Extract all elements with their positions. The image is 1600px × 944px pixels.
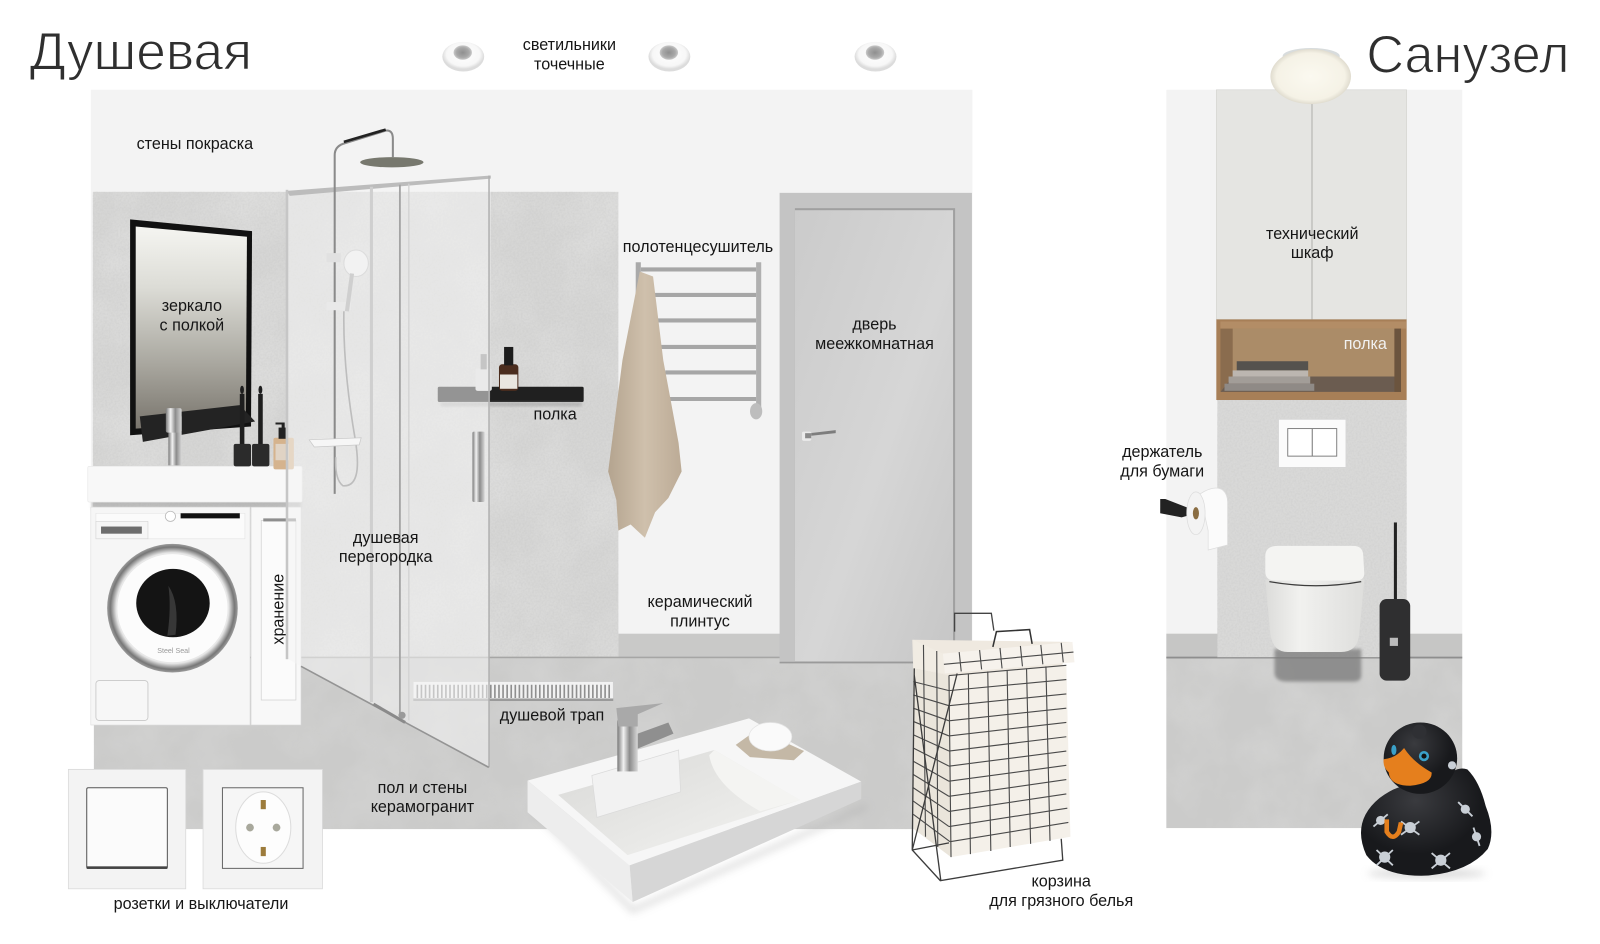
duck beak: [1384, 748, 1432, 786]
label: floor and walls: керамогранит: [371, 798, 475, 816]
toilet shadow: [1274, 649, 1361, 682]
label: door: дверь: [852, 316, 897, 334]
storage cabinet: [251, 507, 301, 725]
basin faucet: [616, 703, 673, 771]
wall-hung toilet: [1265, 546, 1364, 652]
sink: [528, 703, 867, 910]
vanity shadow: [92, 498, 301, 508]
label: paper holder: держатель: [1122, 443, 1202, 461]
label: laundry basket: [989, 873, 1133, 910]
toilet paper holder: [1160, 488, 1228, 550]
flush plate: [1279, 419, 1346, 467]
vanity faucet: [166, 408, 182, 465]
label: door: [815, 316, 934, 353]
stack of books: [1224, 361, 1314, 391]
label: mirror: зеркало: [162, 297, 222, 315]
label: shelf: полка: [533, 405, 577, 423]
label: glass partition: душевая: [353, 529, 419, 547]
label: shower drain: душевой трап: [500, 706, 604, 724]
label: sockets and switches: розетки и выключатели: [114, 895, 288, 913]
label: glass partition: перегородка: [339, 548, 433, 566]
concrete installation wall: [1217, 400, 1407, 657]
label: glass partition: [339, 529, 433, 566]
laundry basket: [912, 613, 1074, 881]
label: floor and walls: [371, 779, 475, 816]
label: paper holder: [1120, 443, 1204, 481]
wall socket: [203, 769, 322, 889]
label: cabinet: шкаф: [1291, 244, 1334, 262]
basket grid pattern: [913, 643, 1073, 857]
floor: [1166, 657, 1462, 828]
mirror with shelf: [130, 219, 255, 442]
label: cabinet: технический: [1266, 225, 1358, 243]
vanity top: [88, 466, 302, 502]
soap dish: [736, 722, 804, 760]
duck eyes: [1419, 751, 1429, 761]
label: laundry basket: для грязного белья: [989, 892, 1133, 910]
label: towel rail: полотенцесушитель: [623, 238, 773, 256]
duck skull print: [1373, 761, 1481, 868]
washing machine: [91, 507, 250, 725]
shower shelf: [438, 347, 584, 406]
label: storage: хранение: [270, 574, 288, 645]
technical cabinet: [1216, 90, 1407, 319]
label: cabinet: [1266, 225, 1358, 262]
towel rail: [636, 262, 762, 419]
basket wire frame: [912, 668, 1063, 881]
porcelain tile floor: [94, 657, 972, 829]
label: mirror: [160, 297, 224, 335]
skirting: [1166, 634, 1462, 658]
ceiling lamp: [1270, 48, 1351, 104]
interior door: [780, 193, 972, 663]
wall switch: [68, 769, 186, 889]
label: walls paint: стены покраска: [137, 135, 253, 153]
label: door: меежкомнатная: [815, 335, 934, 353]
towel: [608, 271, 682, 538]
label: laundry basket: корзина: [1032, 873, 1091, 891]
label: paper holder: для бумаги: [1120, 463, 1204, 481]
electric toothbrushes: [234, 386, 269, 466]
panel: toilet room: [1120, 25, 1569, 879]
wooden niche shelf: [1216, 319, 1407, 400]
toilet brush: [1380, 522, 1410, 681]
shower bottles: [476, 347, 518, 391]
duck orange U mark: [1387, 819, 1401, 837]
label: mirror: с полкой: [160, 317, 224, 335]
shower glass partition: [286, 176, 491, 767]
label: skirting: керамический: [648, 593, 752, 611]
label: spotlights: светильники: [523, 36, 616, 54]
shower drain: [413, 682, 613, 701]
label: skirting: плинтус: [670, 613, 730, 631]
door handle: [802, 430, 836, 441]
rubber duck: [1361, 722, 1491, 879]
label: skirting: [648, 593, 752, 631]
label: spotlights: точечные: [534, 55, 605, 73]
glass door handle: [472, 432, 485, 502]
soap bottle: [273, 422, 294, 469]
label: spotlights: [523, 36, 616, 73]
label: floor and walls: пол и стены: [378, 779, 467, 797]
porcelain tile wall: [93, 192, 618, 658]
painted wall: [1166, 90, 1462, 635]
label: niche shelf: полка: [1344, 335, 1387, 353]
painted wall: [91, 90, 972, 661]
shower column: [309, 130, 423, 494]
panel: shower room: [30, 22, 1133, 913]
washing machine: Steel Seal: [157, 647, 190, 655]
heading: shower room: Душевая: [30, 22, 252, 81]
ceramic skirting: [618, 634, 781, 658]
recessed spotlights: [442, 42, 896, 71]
heading: toilet room: Санузел: [1366, 25, 1569, 84]
